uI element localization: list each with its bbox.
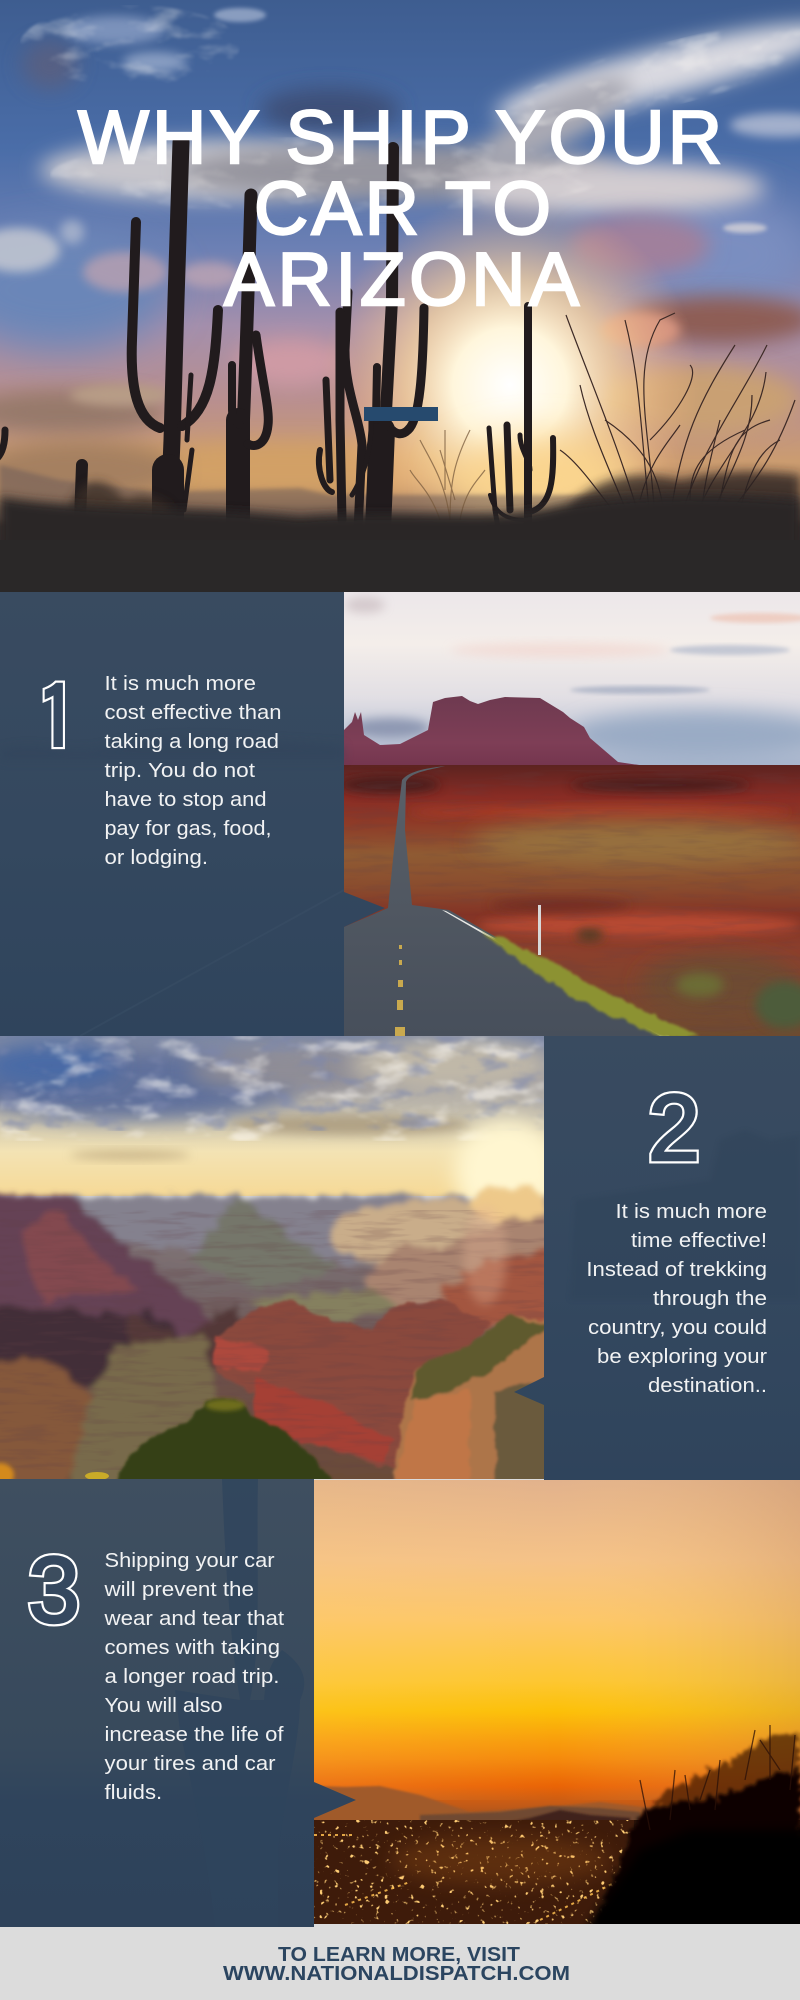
panel: road and mesa photo <box>340 592 800 1037</box>
title: CAR TO <box>254 166 551 250</box>
text block: reason 1: or lodging. <box>104 847 208 869</box>
text block: reason 3: You will also <box>104 1695 222 1717</box>
text block: reason 3: comes with taking <box>104 1637 280 1659</box>
icon: dark desert ground <box>0 490 800 540</box>
text block: reason 2: time effective! <box>631 1230 767 1252</box>
title: ARIZONA <box>224 237 579 321</box>
text block: reason 3: will prevent the <box>103 1579 254 1601</box>
text block: reason 1: taking a long road <box>104 731 279 753</box>
text block: reason 3 <box>103 1550 285 1804</box>
panel: Grand Canyon photo <box>0 1036 570 1496</box>
numeral 1: 1 <box>36 673 78 761</box>
text block: reason 3: wear and tear that <box>103 1608 285 1630</box>
icon: roadside shrubs <box>480 930 700 1036</box>
title <box>78 95 722 321</box>
text block: reason 3: increase the life of <box>104 1724 284 1746</box>
icon: saguaro cacti silhouettes <box>0 142 553 560</box>
numeral 3: 3 <box>28 1537 80 1642</box>
panel: Phoenix city sunset photo <box>314 1480 800 1930</box>
footer panel <box>0 1924 800 2000</box>
text block: reason 1: have to stop and <box>104 789 266 811</box>
text block: reason 3: your tires and car <box>104 1753 276 1775</box>
panel: step 2 <box>514 1036 800 1480</box>
title: WHY SHIP YOUR <box>78 95 722 179</box>
text block: reason 2: be exploring your <box>597 1346 767 1368</box>
icon: distant mountains <box>314 1784 800 1820</box>
icon: canyon layers <box>0 1187 570 1496</box>
icon: sunlit cliff <box>392 1315 550 1490</box>
text block: reason 3: a longer road trip. <box>104 1666 280 1688</box>
text block: reason 2: Instead of trekking <box>586 1259 767 1281</box>
icon: mesa <box>344 696 639 765</box>
text block: reason 1: pay for gas, food, <box>104 818 272 840</box>
text block: reason 3: Shipping your car <box>104 1550 275 1572</box>
footer call to action: WWW.NATIONALDISPATCH.COM <box>223 1963 570 1985</box>
accent bar <box>364 407 438 421</box>
panel: step 1 <box>0 592 385 1036</box>
icon: ocotillo shrub branches <box>560 313 795 520</box>
text block: reason 2: country, you could <box>588 1317 767 1339</box>
text block: reason 2: It is much more <box>616 1201 767 1223</box>
footer call to action <box>223 1944 570 1985</box>
numeral 3: 3 <box>28 1537 80 1642</box>
text block: reason 1: It is much more <box>104 673 256 695</box>
icon: lane dashes <box>395 945 405 1036</box>
numeral 2: 2 <box>648 1075 700 1180</box>
text block: reason 1: cost effective than <box>104 702 282 724</box>
icon: dark foreground brush <box>648 1730 800 1820</box>
icon: red desert ground <box>344 765 800 1037</box>
text block: reason 2: through the <box>653 1288 767 1310</box>
icon: bare bushes <box>410 430 485 520</box>
icon: road <box>344 766 668 1036</box>
footer call to action: TO LEARN MORE, VISIT <box>278 1944 520 1966</box>
icon: green tree <box>115 1399 335 1485</box>
numeral 1: 1 <box>36 673 78 761</box>
text block: reason 1: trip. You do not <box>104 760 255 782</box>
panel: hero photo of saguaro cacti at sunset <box>0 0 800 592</box>
panel: step 3 <box>0 1479 356 1927</box>
text block: reason 1 <box>104 673 282 869</box>
text block: reason 2: destination.. <box>648 1375 767 1397</box>
numeral 2: 2 <box>648 1075 700 1180</box>
icon: red butte <box>214 1300 490 1470</box>
text block: reason 3: fluids. <box>104 1782 162 1804</box>
icon: city lights <box>314 1820 800 1924</box>
text block: reason 2 <box>586 1201 767 1397</box>
icon: distant ridge <box>0 465 800 520</box>
